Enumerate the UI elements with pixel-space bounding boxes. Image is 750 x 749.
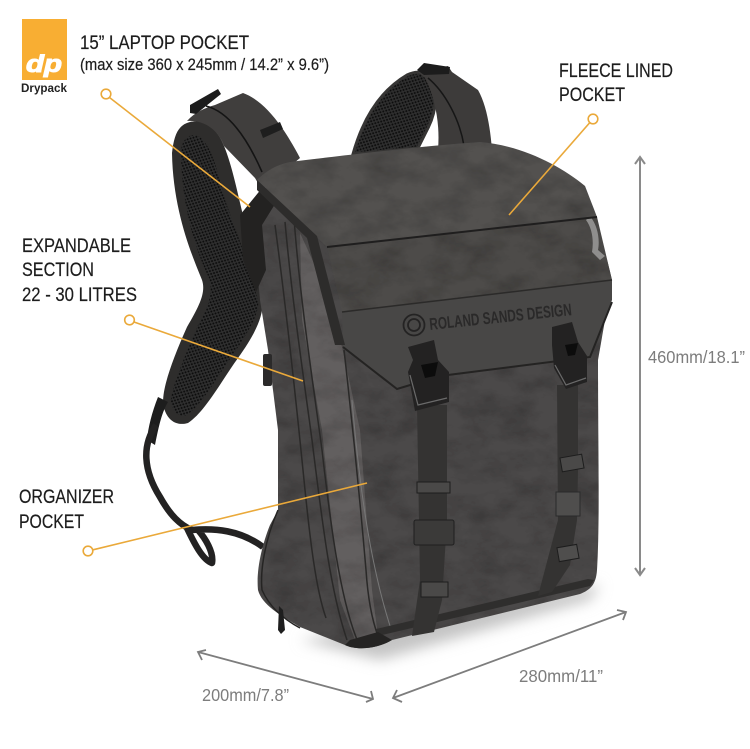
top panel with pocket [327,217,612,312]
heading: expandable section: 22 - 30 LITRES [22,284,137,306]
callout: laptop pocket leader [101,89,250,207]
heading: expandable section: SECTION [22,259,94,281]
backpack illustration [146,63,612,660]
icon: drypack logo: Drypack [21,83,68,95]
callout: expandable section leader [125,315,303,381]
callout: organizer pocket leader [83,483,367,556]
lower webbing strap [146,425,263,563]
arrow: depth dimension [198,650,373,702]
bag body [252,190,612,648]
back harness buckle [240,188,285,292]
top flap [257,142,597,247]
icon: drypack logo: dp [26,51,62,78]
light side panel [300,233,378,640]
ground shadow [300,585,600,660]
arrow: width dimension [393,610,626,702]
heading: laptop pocket: 15” LAPTOP POCKET [80,32,249,54]
heading: laptop pocket [80,32,329,74]
heading: organizer pocket [19,486,114,533]
right buckle [552,322,587,389]
zip pull [586,216,605,260]
front straps and keepers [412,385,584,636]
heading: fleece lined pocket: POCKET [559,84,625,106]
base rim [376,579,594,636]
heading: laptop pocket: (max size 360 x 245mm / 14.2” x 9.6”) [80,56,329,74]
arrow: height dimension [635,157,645,575]
heading: expandable section: EXPANDABLE [22,235,131,257]
left shoulder strap with mesh pad [147,89,300,445]
brand emblem [404,314,424,336]
heading: fleece lined pocket: FLEECE LINED [559,60,673,82]
label: height: 460mm/18.1” [648,347,745,367]
right shoulder strap [353,63,492,154]
bottom zip pull [278,606,285,634]
icon: drypack logo [21,19,68,95]
leather flap [342,280,612,389]
brand text: ROLAND SANDS DESIGN [428,300,573,334]
left buckle [408,340,449,411]
heading: organizer pocket: POCKET [19,511,84,533]
side clip [263,354,272,386]
side zips and seams [262,218,392,642]
label: width: 280mm/11” [519,666,603,686]
label: depth: 200mm/7.8” [202,685,289,705]
heading: expandable section [22,235,137,306]
heading: organizer pocket: ORGANIZER [19,486,114,508]
callout: fleece pocket leader [509,114,598,215]
heading: fleece lined pocket [559,60,673,106]
